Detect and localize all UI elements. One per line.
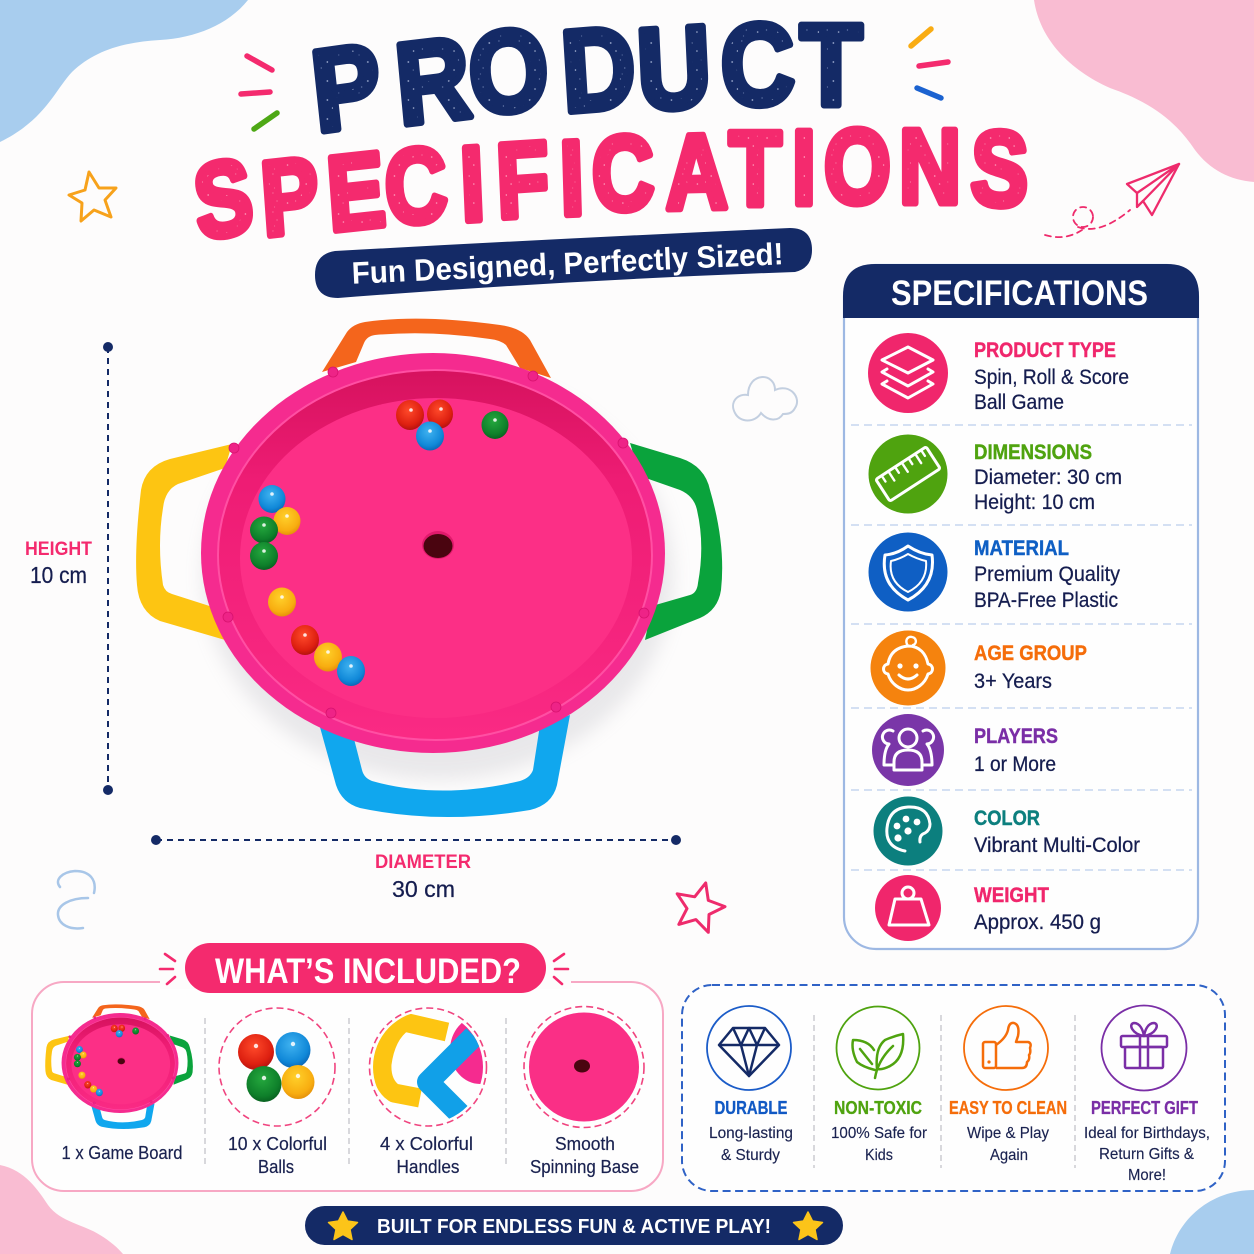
item label: spinning base: Spinning Base — [530, 1157, 639, 1177]
spec: product type: Ball Game — [974, 391, 1064, 414]
diameter label: 30 cm — [392, 876, 455, 902]
spec: age group — [974, 642, 1087, 693]
inner ring — [218, 370, 652, 740]
product image: game board — [136, 319, 722, 817]
item label: game board: 1 x Game Board — [62, 1143, 182, 1163]
icon: title sparks left — [241, 56, 277, 129]
feature: perfect gift: More! — [1128, 1167, 1166, 1184]
feature: non-toxic: NON-TOXIC — [834, 1098, 922, 1118]
sparks left — [160, 954, 175, 984]
icon: thumbs up — [964, 1006, 1048, 1090]
icon: yellow star outline — [69, 172, 116, 221]
panel: features — [682, 985, 1225, 1191]
feature: easy to clean: Again — [990, 1147, 1028, 1164]
item label: balls: 10 x Colorful — [228, 1134, 327, 1154]
spec: product type: PRODUCT TYPE — [974, 339, 1116, 362]
icon: players — [872, 714, 944, 786]
spec: dimensions — [974, 441, 1122, 514]
spec: dimensions: DIMENSIONS — [974, 441, 1092, 464]
item label: handles: Handles — [396, 1157, 460, 1177]
panel frame — [682, 985, 1225, 1191]
spec: product type — [974, 339, 1129, 414]
title: specifications: SPECIFICATIONS — [188, 108, 1030, 263]
feature: perfect gift — [1084, 1098, 1210, 1184]
feature: perfect gift: Return Gifts & — [1099, 1146, 1194, 1163]
bottom banner — [305, 1206, 843, 1245]
icon: leaf — [836, 1006, 920, 1090]
spec: material: Premium Quality — [974, 563, 1120, 586]
item label: handles: 4 x Colorful — [380, 1134, 473, 1154]
spec: weight: Approx. 450 g — [974, 911, 1101, 934]
icon: ruler — [868, 434, 948, 514]
icon: paper plane — [1045, 164, 1179, 237]
icon: diamond — [707, 1006, 791, 1090]
feature: easy to clean: Wipe & Play — [967, 1125, 1049, 1142]
icon: weight — [875, 875, 941, 941]
feature: non-toxic — [831, 1098, 928, 1164]
sparks right — [554, 954, 568, 984]
spec: material: MATERIAL — [974, 537, 1069, 560]
feature: perfect gift: PERFECT GIFT — [1091, 1098, 1198, 1118]
feature: easy to clean: EASY TO CLEAN — [949, 1098, 1067, 1118]
feature: durable: DURABLE — [714, 1098, 788, 1118]
spec: material — [974, 537, 1120, 612]
feature: easy to clean — [949, 1098, 1067, 1164]
height label — [25, 539, 92, 588]
feature: perfect gift: Ideal for Birthdays, — [1084, 1125, 1210, 1142]
icon: cloud — [733, 377, 797, 420]
included heading pill: WHAT’S INCLUDED? — [215, 952, 521, 991]
item image: spinning base — [524, 1006, 644, 1128]
spec: material: BPA-Free Plastic — [974, 589, 1118, 612]
board floor — [240, 398, 632, 718]
icon: layers — [868, 333, 948, 413]
item image: mini game board — [45, 1004, 193, 1129]
centre hole — [422, 531, 454, 559]
blob: bottom right blue — [1170, 1190, 1254, 1254]
spec: color — [974, 807, 1140, 857]
spec: weight: WEIGHT — [974, 884, 1049, 907]
included heading pill — [185, 943, 546, 993]
item image: balls — [219, 1008, 335, 1126]
diameter label — [375, 852, 471, 902]
spec: dimensions: Diameter: 30 cm — [974, 466, 1122, 489]
diameter dimension line — [151, 835, 681, 845]
spec: dimensions: Height: 10 cm — [974, 491, 1095, 514]
spec: weight — [974, 884, 1101, 934]
item image: handles — [368, 1007, 488, 1127]
blob: bottom left pink — [0, 1165, 123, 1254]
spec: age group: 3+ Years — [974, 670, 1052, 693]
item label: handles — [380, 1134, 473, 1177]
icon: shield — [868, 532, 948, 612]
handle: orange — [322, 319, 551, 378]
height dimension line — [103, 342, 113, 795]
height label: 10 cm — [30, 562, 87, 588]
icon: palette — [874, 796, 942, 866]
icon: star left — [328, 1212, 358, 1240]
spec: color: COLOR — [974, 807, 1040, 830]
panel heading: SPECIFICATIONS — [891, 274, 1148, 313]
board rim — [201, 353, 665, 753]
panel frame — [844, 265, 1198, 949]
banner text: BUILT FOR ENDLESS FUN & ACTIVE PLAY! — [377, 1216, 771, 1238]
panel header — [843, 264, 1199, 318]
panel: what's included — [32, 943, 663, 1191]
icon: title sparks right — [911, 29, 948, 98]
spec: product type: Spin, Roll & Score — [974, 366, 1129, 389]
feature: non-toxic: Kids — [865, 1147, 893, 1164]
balls — [250, 400, 508, 686]
feature: durable — [709, 1098, 793, 1164]
item label: balls: Balls — [258, 1157, 294, 1177]
feature: durable: Long-lasting — [709, 1125, 793, 1142]
feature: durable: & Sturdy — [721, 1147, 780, 1164]
diameter label: DIAMETER — [375, 852, 471, 873]
rivets — [223, 367, 649, 718]
item label: spinning base — [530, 1134, 639, 1177]
panel: specifications — [843, 264, 1199, 949]
item label: balls — [228, 1134, 327, 1177]
spec: color: Vibrant Multi-Color — [974, 834, 1140, 857]
feature: non-toxic: 100% Safe for — [831, 1125, 928, 1142]
height label: HEIGHT — [25, 539, 92, 560]
handle: green — [630, 443, 722, 640]
handle: yellow — [136, 444, 232, 642]
tagline banner: Fun Designed, Perfectly Sized! — [351, 236, 784, 291]
panel frame — [32, 982, 663, 1191]
icon: gift — [1102, 1006, 1186, 1090]
icon: pink star outline — [677, 883, 725, 932]
board shadow — [203, 370, 673, 780]
spec: players: 1 or More — [974, 753, 1056, 776]
spec: players: PLAYERS — [974, 725, 1058, 748]
spec: players — [974, 725, 1058, 776]
title: product: PRODUCT — [306, 0, 862, 157]
blob: top left blue — [0, 0, 248, 142]
blob: top right pink — [1034, 0, 1254, 182]
handle: blue — [318, 715, 570, 817]
icon: star right — [794, 1212, 822, 1240]
icon: swirl — [58, 871, 95, 928]
item label: spinning base: Smooth — [555, 1134, 615, 1154]
spec: age group: AGE GROUP — [974, 642, 1087, 665]
icon: baby face — [870, 630, 946, 706]
